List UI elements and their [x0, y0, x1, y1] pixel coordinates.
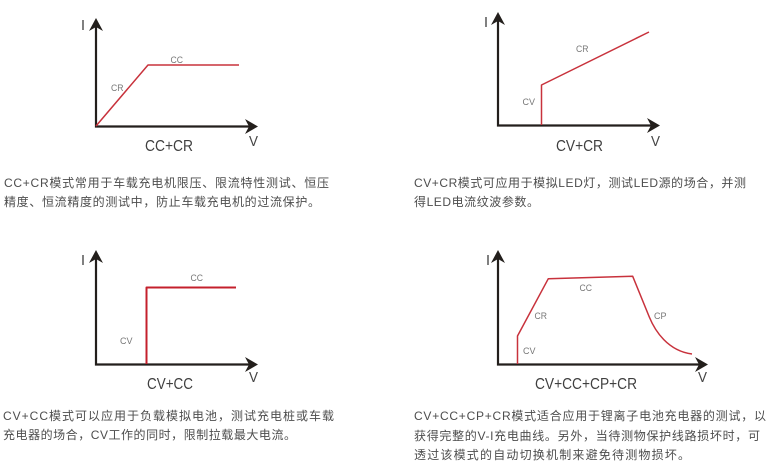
heading: CV+CC: CV+CC — [147, 376, 193, 393]
label: CP: CP — [654, 311, 666, 322]
chart: CV+CC+CP+CR curve — [486, 250, 708, 386]
text block: CV+CR description: 得LED电流纹波参数。 — [414, 194, 539, 209]
axes: I — [484, 14, 488, 31]
axes: I — [81, 17, 85, 34]
text block: CV+CC description: 充电器的场合，CV工作的同时，限制拉载最大电流。 — [3, 427, 296, 442]
text block: CC+CR description: 精度、恒流精度的测试中，防止车载充电机的过流保护。 — [4, 194, 320, 209]
heading: CV+CC+CP+CR: CV+CC+CP+CR — [535, 376, 637, 393]
axes — [81, 250, 258, 386]
panel: CC+CR — [4, 17, 333, 209]
label: CR: CR — [534, 311, 547, 322]
red line — [518, 276, 692, 364]
red line — [96, 65, 239, 126]
axes: V — [249, 369, 258, 386]
chart: CC+CR curve — [81, 17, 258, 150]
axes — [81, 17, 258, 150]
label: CR: CR — [576, 44, 589, 55]
label: CV: CV — [522, 97, 536, 108]
text block: CV+CC+CP+CR description: 获得完整的V-I充电曲线。另外，当待测物保护线路损坏时，可 — [414, 428, 760, 443]
axes: V — [249, 133, 258, 150]
label: CC: CC — [580, 283, 592, 294]
axes: V — [651, 133, 660, 150]
red line — [146, 288, 236, 364]
label: CR: CR — [111, 83, 124, 94]
axes — [486, 250, 708, 386]
heading: CC+CR: CC+CR — [145, 138, 193, 155]
heading: CV+CR: CV+CR — [556, 138, 603, 155]
text block: CV+CR description: CV+CR模式可应用于模拟LED灯，测试LED源的场合，并测 — [414, 175, 746, 190]
text block: CV+CC+CP+CR description: 透过该模式的自动切换机制来避免待测物损坏。 — [414, 447, 690, 462]
label: CC: CC — [170, 55, 183, 66]
panel: CV+CC — [3, 250, 338, 442]
label: CC: CC — [190, 273, 203, 284]
text block: CC+CR description: CC+CR模式常用于车载充电机限压、限流特性测试、恒压 — [4, 175, 329, 190]
text block: CV+CC+CP+CR description: CV+CC+CP+CR模式适合应用于锂离子电池充电器的测试，以 — [414, 408, 766, 423]
axes: I — [486, 252, 490, 269]
red line — [542, 32, 649, 125]
label: CV: CV — [523, 346, 536, 357]
panel: CV+CC+CP+CR — [414, 250, 770, 462]
label: CV: CV — [120, 336, 133, 347]
chart: CV+CR curve — [484, 12, 660, 150]
text block: CV+CC description: CV+CC模式可以应用于负载模拟电池，测试充电桩或车载 — [3, 408, 334, 423]
axes: I — [81, 252, 85, 269]
chart: CV+CC curve — [81, 250, 258, 386]
axes: V — [698, 369, 707, 386]
panel: CV+CR — [414, 12, 750, 209]
axes — [484, 12, 660, 150]
